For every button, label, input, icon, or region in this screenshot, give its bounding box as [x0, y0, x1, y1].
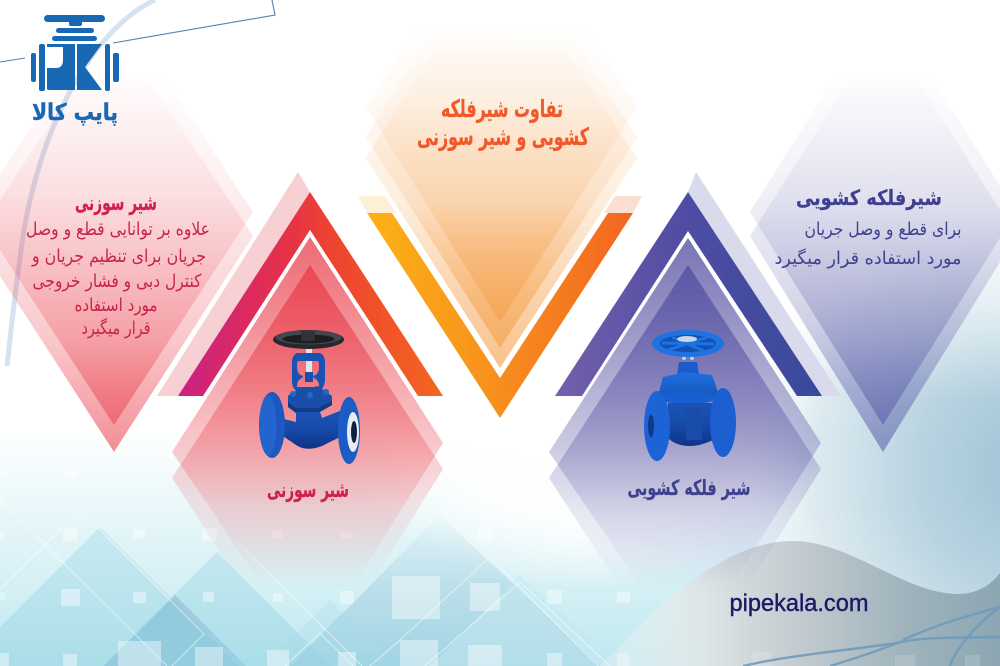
chevron: red triangle [157, 172, 443, 396]
title [417, 95, 589, 151]
background: bottom triangles [0, 515, 620, 666]
label: needle valve: شیر سوزنی [267, 478, 349, 502]
panel: needle valve diamonds [172, 237, 443, 666]
label: gate valve: شیر فلکه کشویی [628, 476, 750, 500]
title: تفاوت شیرفلکه [441, 95, 563, 123]
text block: needle valve: شیر سوزنی [75, 191, 157, 215]
panel: needle valve description diamonds [0, 0, 253, 452]
text block: gate valve: شیرفلکه کشویی [796, 186, 942, 210]
background: thin white outlines [0, 430, 610, 666]
text block: gate valve: برای قطع و وصل جریان [804, 220, 962, 240]
panel: title diamonds [366, 0, 637, 368]
text block: needle valve [26, 191, 210, 339]
squares over wave [752, 652, 980, 666]
text block: gate valve: مورد استفاده قرار میگیرد [774, 248, 962, 269]
text block: needle valve: قرار میگیرد [82, 317, 150, 339]
logo wordmark: پایپ کالا [32, 100, 118, 126]
website url: pipekala.com [729, 591, 869, 617]
logo: pipekala [31, 15, 119, 126]
title: کشویی و شیر سوزنی [417, 123, 589, 151]
background: lower cyan wash [0, 290, 1000, 666]
panel: gate valve description diamonds [750, 0, 1000, 452]
background: right blue-gray glow [730, 160, 1000, 666]
background: translucent squares [0, 465, 630, 666]
chevron: orange V [358, 196, 642, 418]
gray wave bottom right [600, 541, 1000, 666]
text block: needle valve: جریان برای تنظیم جریان و [31, 246, 206, 267]
network lines bottom right [743, 607, 1000, 666]
decorative light arc top left [7, 0, 155, 366]
text block: needle valve: مورد استفاده [74, 295, 158, 316]
text block: needle valve: علاوه بر توانایی قطع و وصل [26, 219, 210, 240]
icon: needle valve [259, 330, 360, 464]
decorative thin line top left [0, 0, 275, 62]
panel: gate valve diamonds [549, 238, 821, 666]
text block: needle valve: کنترل دبی و فشار خروجی [32, 271, 202, 292]
text block: gate valve [774, 186, 962, 269]
chevron: blue triangle [555, 172, 841, 396]
icon: gate valve [644, 330, 736, 461]
